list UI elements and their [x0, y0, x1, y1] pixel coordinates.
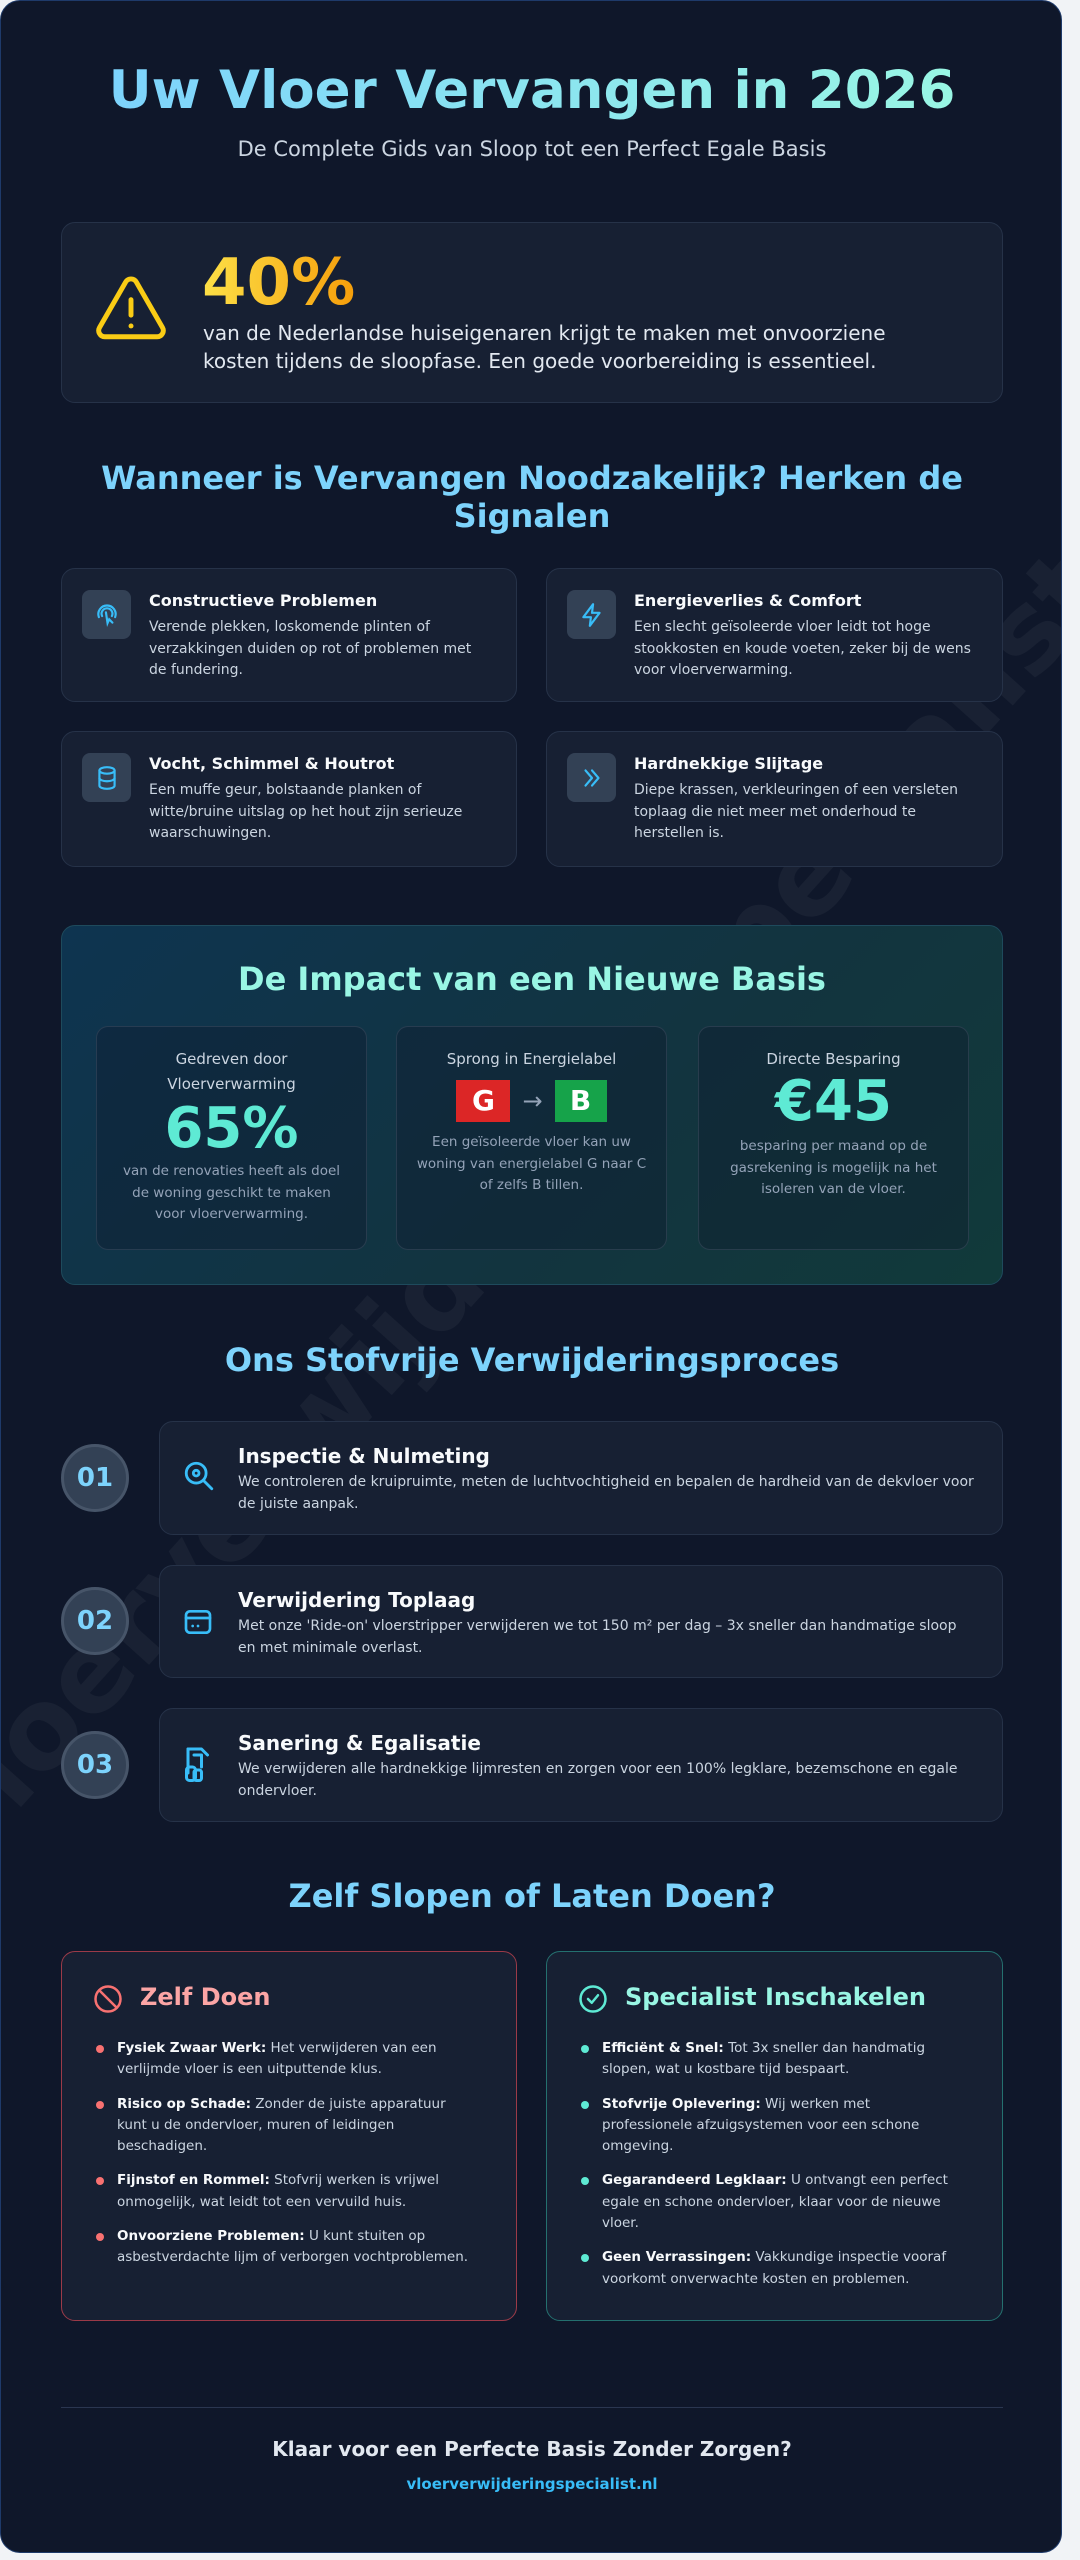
heading: impact: De Impact van een Nieuwe Basis	[238, 960, 826, 998]
icon: chevrons	[567, 753, 616, 802]
stat: €45: besparing per maand op de gasrekening is mogelijk na het isoleren van de vloer.	[730, 1138, 937, 1197]
stat: 65%: Vloerverwarming	[167, 1075, 296, 1093]
step 03 number: 03	[77, 1750, 113, 1780]
stat: 65%: van de renovaties heeft als doel de woning geschikt te maken voor vloerverwarming.	[123, 1163, 340, 1222]
panel: constructieve problemen: Verende plekken, loskomende plinten of verzakkingen duiden op rot of problemen met de fundering.	[149, 619, 471, 678]
footer CTA: Klaar voor een Perfecte Basis Zonder Zorgen?	[272, 2437, 792, 2461]
icon: machine	[184, 1610, 212, 1634]
panel: vocht	[61, 731, 517, 867]
header zelf doen: Zelf Doen	[140, 1983, 270, 2011]
panel: zelf doen	[61, 1951, 517, 2321]
stat: €45: €45	[775, 1069, 892, 1134]
panel: energieverlies: Energieverlies & Comfort	[634, 591, 861, 610]
alert text: van de Nederlandse huiseigenaren krijgt te maken met onvoorziene kosten tijdens de sloopfase. Een goede voorbereiding is essentieel.	[203, 321, 886, 373]
list: cons: Onvoorziene Problemen: U kunt stuiten op asbestverdachte lijm of verborgen vochtproblemen.	[117, 2228, 468, 2265]
step 01 card: We controleren de kruipruimte, meten de luchtvochtigheid en bepalen de hardheid van de dekvloer voor de juiste aanpak.	[238, 1474, 974, 1512]
icon: search	[184, 1462, 214, 1490]
alert box: 40%	[61, 222, 1003, 403]
icon: warning	[96, 276, 166, 340]
list: pros: Gegarandeerd Legklaar: U ontvangt een perfect egale en schone ondervloer, klaar voor de nieuwe vloer.	[602, 2172, 948, 2231]
panel: slijtage: Hardnekkige Slijtage	[634, 754, 823, 773]
stat: €45	[698, 1026, 969, 1250]
heading: process: Ons Stofvrije Verwijderingsproces	[225, 1341, 839, 1379]
step 01 number	[61, 1444, 129, 1512]
step 03 card: We verwijderen alle hardnekkige lijmresten en zorgen voor een 100% legklare, bezemschone en egale ondervloer.	[238, 1761, 958, 1799]
panel: constructieve problemen	[61, 568, 517, 702]
icon: pointer	[82, 590, 131, 639]
panel: vocht: Een muffe geur, bolstaande planken of witte/bruine uitslag op het hout zijn serieuze waarschuwingen.	[149, 782, 462, 841]
stat 40%: 40%	[202, 246, 355, 320]
step 02 number	[61, 1587, 129, 1655]
step 02 card: Verwijdering Toplaag	[238, 1588, 475, 1612]
panel: energieverlies: Een slecht geïsoleerde vloer leidt tot hoge stookkosten en koude voeten, zeker bij de wens voor vloerverwarming.	[634, 619, 971, 678]
panel: slijtage	[546, 731, 1003, 867]
list: cons	[96, 2040, 468, 2265]
step 01 number: 01	[77, 1463, 113, 1493]
panel: slijtage: Diepe krassen, verkleuringen of een versleten toplaag die niet meer met onderhoud te herstellen is.	[634, 782, 958, 841]
title: Uw Vloer Vervangen in 2026	[109, 60, 955, 121]
stat: 65%: Gedreven door	[176, 1050, 287, 1068]
panel: specialist	[546, 1951, 1003, 2321]
icon: check circle	[579, 1985, 607, 2013]
panel: vocht: Vocht, Schimmel & Houtrot	[149, 754, 394, 773]
stat: energielabel G to B	[396, 1026, 667, 1250]
stat: €45: Directe Besparing	[766, 1050, 901, 1068]
list: pros	[581, 2040, 948, 2287]
step 01 card: Inspectie & Nulmeting	[238, 1444, 490, 1468]
step 01 card	[159, 1421, 1003, 1535]
subtitle: De Complete Gids van Sloop tot een Perfect Egale Basis	[238, 137, 826, 161]
stat: energielabel G to B: Een geïsoleerde vloer kan uw woning van energielabel G naar C of zelfs B tillen.	[417, 1134, 646, 1193]
stat: energielabel G to B: Sprong in Energielabel	[447, 1050, 616, 1068]
step 03 card: Sanering & Egalisatie	[238, 1731, 481, 1755]
stat: energielabel G to B: B	[570, 1084, 591, 1117]
list: pros: Efficiënt & Snel: Tot 3x sneller dan handmatig slopen, wat u kostbare tijd bespaart.	[602, 2040, 925, 2077]
step 03 number	[61, 1731, 129, 1799]
step 02 card: Met onze 'Ride-on' vloerstripper verwijderen we tot 150 m² per dag – 3x sneller dan handmatige sloop en met minimale overlast.	[238, 1618, 957, 1656]
header specialist: Specialist Inschakelen	[625, 1983, 926, 2011]
heading: signals: Wanneer is Vervangen Noodzakelijk? Herken de Signalen	[101, 459, 963, 535]
icon: spray	[185, 1748, 210, 1782]
list: pros: Stofvrije Oplevering: Wij werken met professionele afzuigsystemen voor een schone omgeving.	[602, 2096, 919, 2154]
icon: lightning	[567, 590, 616, 639]
stat: energielabel G to B: →	[522, 1087, 543, 1115]
step 02 card	[159, 1565, 1003, 1678]
step 02 number: 02	[77, 1606, 113, 1636]
icon: ban	[94, 1985, 122, 2013]
panel: constructieve problemen: Constructieve Problemen	[149, 591, 377, 610]
icon: cylinder	[82, 753, 131, 802]
step 03 card	[159, 1708, 1003, 1822]
panel: energieverlies	[546, 568, 1003, 702]
heading: DIY vs specialist: Zelf Slopen of Laten Doen?	[288, 1877, 776, 1915]
list: cons: Risico op Schade: Zonder de juiste apparatuur kunt u de ondervloer, muren of leidingen beschadigen.	[117, 2096, 446, 2154]
footer url: vloerverwijderingspecialist.nl	[406, 2475, 658, 2493]
list: cons: Fysiek Zwaar Werk: Het verwijderen van een verlijmde vloer is een uitputtende klus.	[117, 2040, 436, 2077]
stat: 65%	[96, 1026, 367, 1250]
stat: 65%: 65%	[164, 1096, 299, 1161]
panel: impact	[61, 925, 1003, 1285]
list: cons: Fijnstof en Rommel: Stofvrij werken is vrijwel onmogelijk, wat leidt tot een vervuild huis.	[117, 2172, 439, 2210]
list: pros: Geen Verrassingen: Vakkundige inspectie vooraf voorkomt onverwachte kosten en problemen.	[602, 2249, 946, 2287]
stat: energielabel G to B: G	[472, 1084, 495, 1117]
